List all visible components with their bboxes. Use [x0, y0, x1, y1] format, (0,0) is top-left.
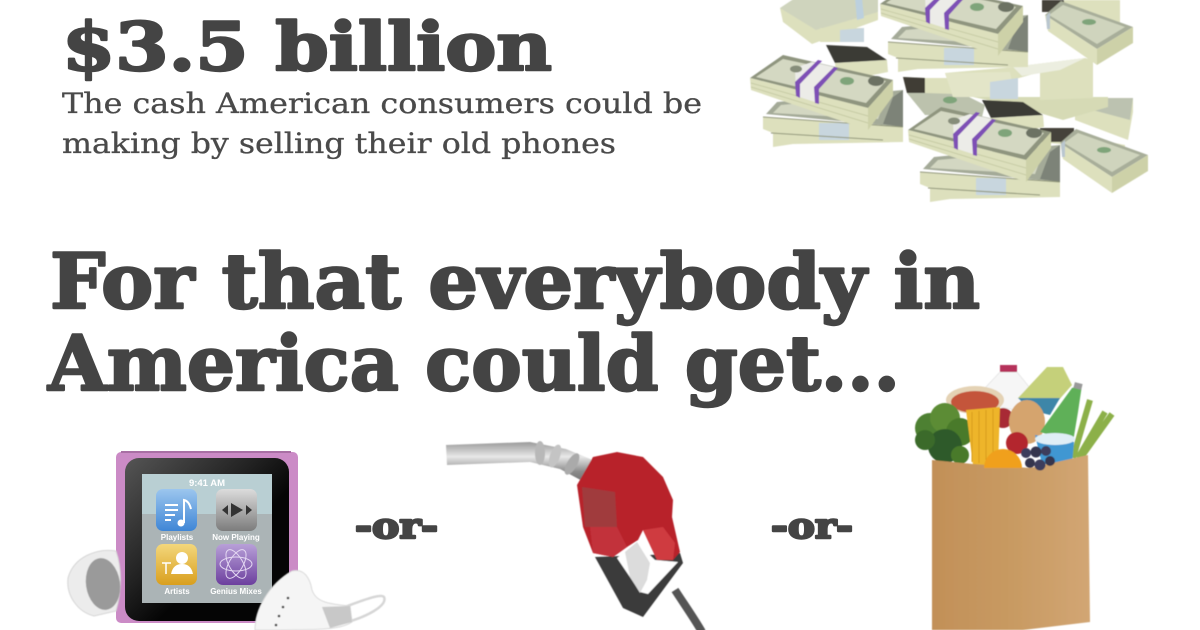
app: Genius Mixes — [210, 544, 262, 596]
top left stack — [780, 0, 878, 42]
nozzle trigger guard — [595, 553, 683, 617]
groceries — [915, 365, 1112, 465]
text block: cash description — [62, 87, 702, 160]
right earbud — [255, 570, 384, 630]
paper bag — [932, 455, 1090, 630]
app: Playlists — [156, 489, 197, 542]
rear right lower stack — [1075, 98, 1133, 140]
text block: cash description: making by selling their old phones — [62, 127, 616, 160]
icon: red gas pump nozzle — [446, 441, 702, 630]
app: Artists: Artists — [164, 587, 190, 596]
app: Now Playing: Now Playing — [212, 533, 260, 542]
nozzle spout — [446, 442, 600, 484]
icon: grocery bag with food — [915, 365, 1112, 630]
iPod body — [116, 452, 298, 623]
iPod bezel — [125, 458, 289, 621]
front produce — [984, 446, 1055, 470]
rear right upper stack — [1042, 0, 1120, 23]
heading: $3.5 billion: $3.5 billion — [62, 8, 552, 86]
icon: stacks of money — [750, 0, 1148, 202]
text: -or- second: -or- — [771, 506, 853, 547]
app: Genius Mixes: Genius Mixes — [210, 587, 262, 596]
nozzle red body — [577, 452, 680, 560]
heading: For that everybody in America could get — [47, 237, 980, 408]
iPod clock: 9:41 AM — [189, 478, 225, 489]
app: Artists — [156, 544, 197, 596]
central mid stack — [973, 97, 1108, 120]
heading: For that everybody in America could get: For that everybody in — [50, 237, 980, 326]
rear center stack — [903, 77, 985, 117]
iPod screen — [142, 474, 272, 603]
nozzle hose — [675, 590, 702, 630]
app: Playlists: Playlists — [161, 533, 194, 542]
app: Now Playing — [212, 489, 260, 542]
icon: pink iPod nano with earbuds — [68, 452, 384, 630]
text: -or- first: -or- — [355, 506, 438, 547]
left earbud — [68, 550, 123, 616]
heading: For that everybody in America could get: America could get... — [47, 319, 900, 408]
text block: cash description: The cash American consumers could be — [62, 87, 702, 120]
